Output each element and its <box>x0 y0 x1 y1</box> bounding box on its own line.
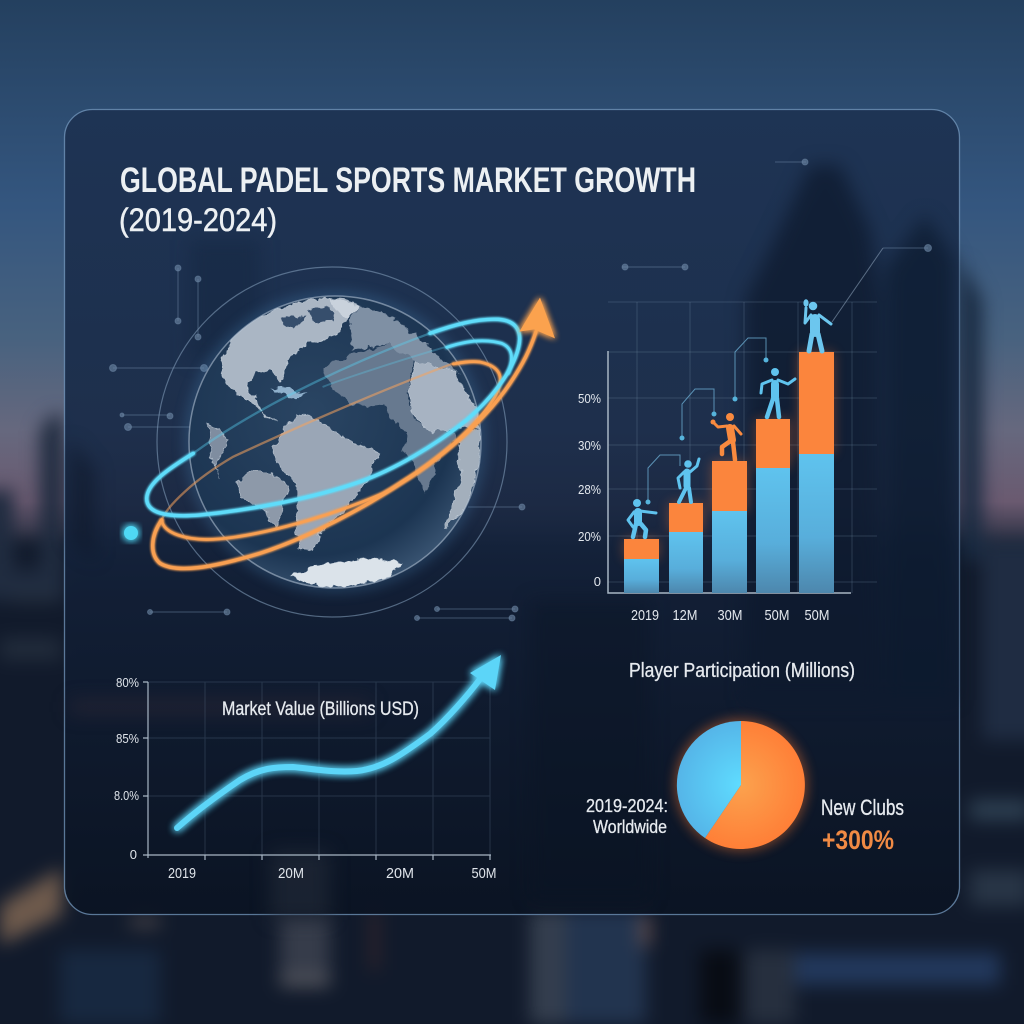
bar chart: player participation <box>578 248 883 682</box>
x axis labels: 2019 <box>631 607 659 624</box>
icon: player 1 <box>628 499 656 537</box>
x axis labels: 12M <box>672 607 698 624</box>
y axis labels <box>578 391 601 589</box>
chart title: Market Value (Billions USD) <box>222 699 419 720</box>
panel: glass dashboard card <box>64 110 960 920</box>
x axis labels <box>168 865 496 882</box>
orbit rings with orange arrow <box>147 298 555 569</box>
x axis labels: 50M <box>764 607 790 624</box>
icon: player 4 <box>761 368 795 417</box>
icon: orange player <box>710 413 741 460</box>
line chart: market value <box>114 655 501 882</box>
cyan orbit, back half <box>193 333 430 453</box>
icon: glass globe with continents <box>183 290 487 594</box>
x axis labels: 2019 <box>168 865 196 882</box>
pie label: period and scope: 2019-2024: <box>586 796 668 816</box>
title: (2019-2024) <box>119 202 277 238</box>
y axis labels: 85% <box>116 731 139 746</box>
icon: cyan dot <box>124 526 138 540</box>
y axis labels: 28% <box>578 482 601 497</box>
x axis labels: 30M <box>718 607 742 624</box>
connector lines <box>648 248 883 501</box>
pie chart: worldwide share <box>675 719 807 851</box>
y axis labels: 0 <box>130 847 137 862</box>
icon: player 2 <box>678 459 699 502</box>
y axis labels: 80% <box>116 675 139 690</box>
second cyan orbit, back half <box>323 347 447 387</box>
y axis labels: 20% <box>578 529 601 544</box>
title <box>119 161 696 238</box>
bars <box>624 352 834 593</box>
orange outer orbit front with arrow <box>153 332 536 569</box>
callout: new clubs +300%: +300% <box>822 825 894 855</box>
grid lines and axes <box>608 302 877 593</box>
y axis labels: 50% <box>578 391 601 406</box>
y axis labels: 0 <box>594 574 601 589</box>
arrowhead <box>519 298 555 338</box>
cyan orbit front <box>147 319 520 516</box>
pie label: period and scope: Worldwide <box>593 817 667 837</box>
chart title: Player Participation (Millions) <box>629 660 855 682</box>
orange bar glow <box>624 352 834 559</box>
rising trend line and arrow <box>177 655 501 828</box>
orange inner orbit front <box>162 362 500 539</box>
decorative circuit lines with nodes <box>110 159 932 621</box>
x axis labels: 50M <box>804 607 830 624</box>
x axis labels: 20M <box>386 865 414 882</box>
grid lines <box>148 682 490 855</box>
outer thin ring around globe <box>157 267 507 617</box>
icon: player 5 with racket <box>803 299 831 351</box>
second cyan orbit front <box>447 341 512 373</box>
callout: new clubs +300% <box>821 795 904 855</box>
pie label: period and scope <box>586 796 668 837</box>
title: GLOBAL PADEL SPORTS MARKET GROWTH <box>120 161 696 200</box>
y axis labels <box>114 675 139 862</box>
x axis labels <box>631 607 830 624</box>
y axis labels: 30% <box>578 438 601 453</box>
callout: new clubs +300%: New Clubs <box>821 795 904 820</box>
x axis labels: 20M <box>278 865 304 882</box>
orange orbit, back half <box>162 363 453 520</box>
x axis labels: 50M <box>472 865 496 882</box>
y axis labels: 8.0% <box>114 788 139 803</box>
